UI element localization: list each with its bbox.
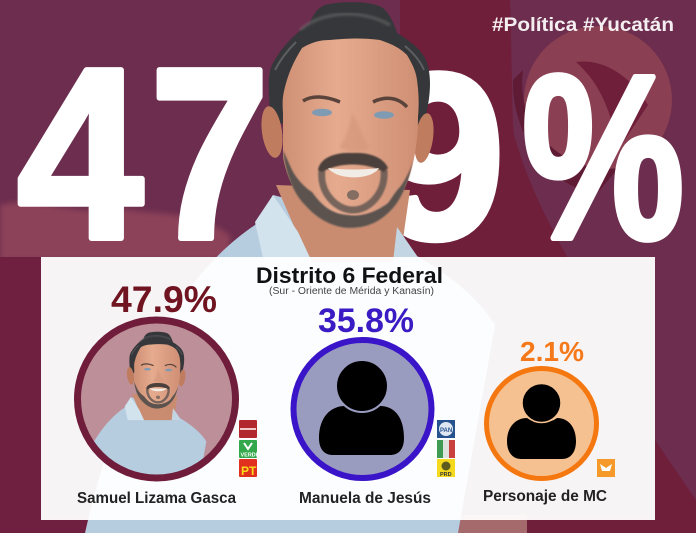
logo: Verde	[239, 440, 260, 458]
logo: PRI	[437, 440, 455, 458]
candidate 1 name: Samuel Lizama Gasca	[77, 490, 236, 507]
candidate 2 avatar	[294, 340, 432, 478]
big percentage: 47.9%: %	[522, 27, 684, 288]
big percentage: 47.9%: 4	[17, 17, 143, 290]
results panel	[41, 257, 655, 520]
logo: Verde: VERDE	[240, 452, 260, 458]
logo: Morena	[239, 420, 257, 438]
logo: PAN: PAN	[440, 428, 452, 434]
big percentage: 47.9%: 9	[374, 25, 505, 289]
big percentage: 47.9%: .	[262, 17, 330, 290]
big percentage: 47.9%: 7	[150, 17, 269, 290]
hashtags: #Política #Yucatán	[492, 15, 674, 36]
logo: PRD	[437, 459, 455, 478]
panel heading: Distrito 6 Federal	[256, 263, 443, 288]
main photo: candidate portrait	[85, 2, 495, 533]
logo: Movimiento Ciudadano	[597, 459, 615, 477]
logo: PRD: PRD	[440, 472, 452, 478]
logo: PT: PT	[241, 464, 257, 478]
logo: PT	[239, 459, 257, 478]
decorative ring	[524, 26, 672, 174]
candidate 1 percentage: 47.9%	[111, 279, 217, 320]
candidate 3 percentage: 2.1%	[520, 336, 584, 367]
big percentage: 47.9%	[17, 17, 684, 290]
candidate 2 name: Manuela de Jesús	[299, 490, 431, 507]
candidate 3 avatar	[486, 368, 596, 478]
candidate 3 name: Personaje de MC	[483, 488, 607, 505]
candidate 2 percentage: 35.8%	[318, 302, 414, 340]
candidate 1 portrait	[74, 316, 239, 482]
panel subheading: (Sur - Oriente de Mérida y Kanasín)	[269, 286, 434, 297]
logo: PAN	[437, 420, 455, 438]
